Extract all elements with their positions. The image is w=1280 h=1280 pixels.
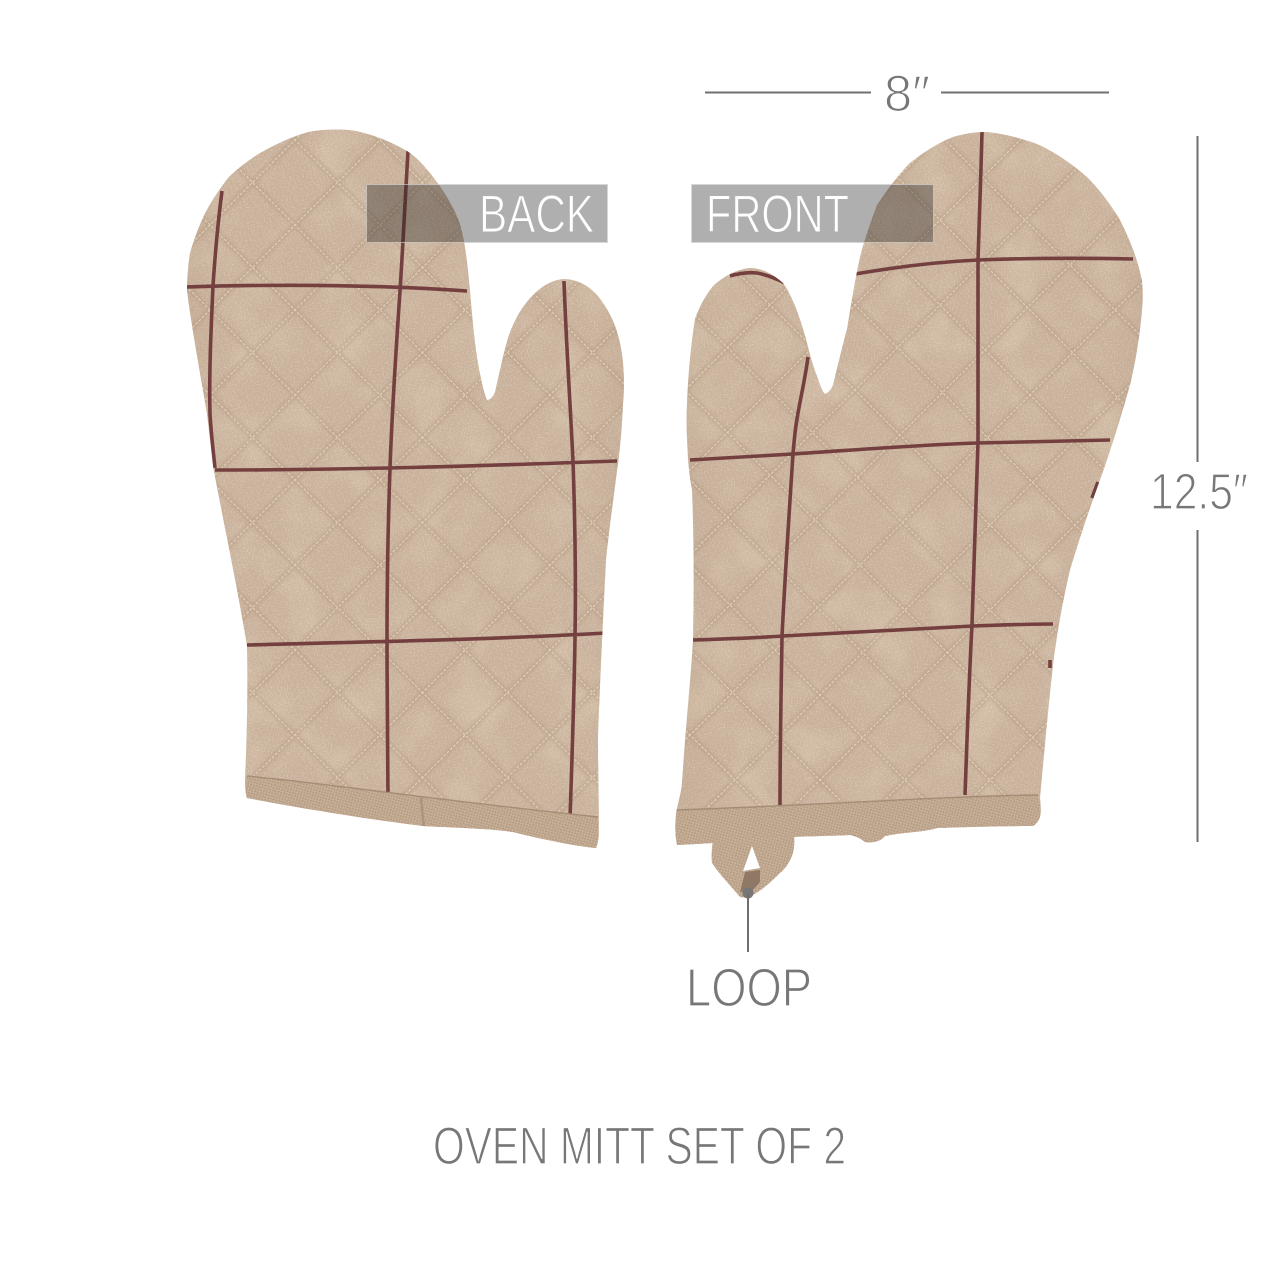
left mitt cuff: [246, 777, 598, 848]
label: back: BACK: [479, 185, 594, 244]
label: front: FRONT: [706, 185, 849, 244]
left mitt plaid stripes: [185, 151, 617, 819]
right mitt cuff: [675, 796, 1041, 845]
right mitt plaid stripes: [690, 132, 1133, 807]
callout: loop: [686, 888, 812, 1018]
dimension: height 12.5 inches: 12.5″: [1150, 463, 1248, 520]
right oven mitt (front view): [675, 132, 1143, 898]
right mitt quilting seams: [685, 138, 1142, 840]
left mitt quilting seams: [187, 133, 624, 846]
hanging loop: [712, 835, 794, 898]
left oven mitt (back view): [187, 130, 624, 848]
caption: OVEN MITT SET OF 2: [433, 1117, 846, 1176]
callout: loop: LOOP: [686, 958, 812, 1018]
dimension: width 8 inches: 8″: [884, 65, 930, 122]
label: back: [366, 184, 608, 244]
infographic canvas: [187, 76, 1246, 1164]
